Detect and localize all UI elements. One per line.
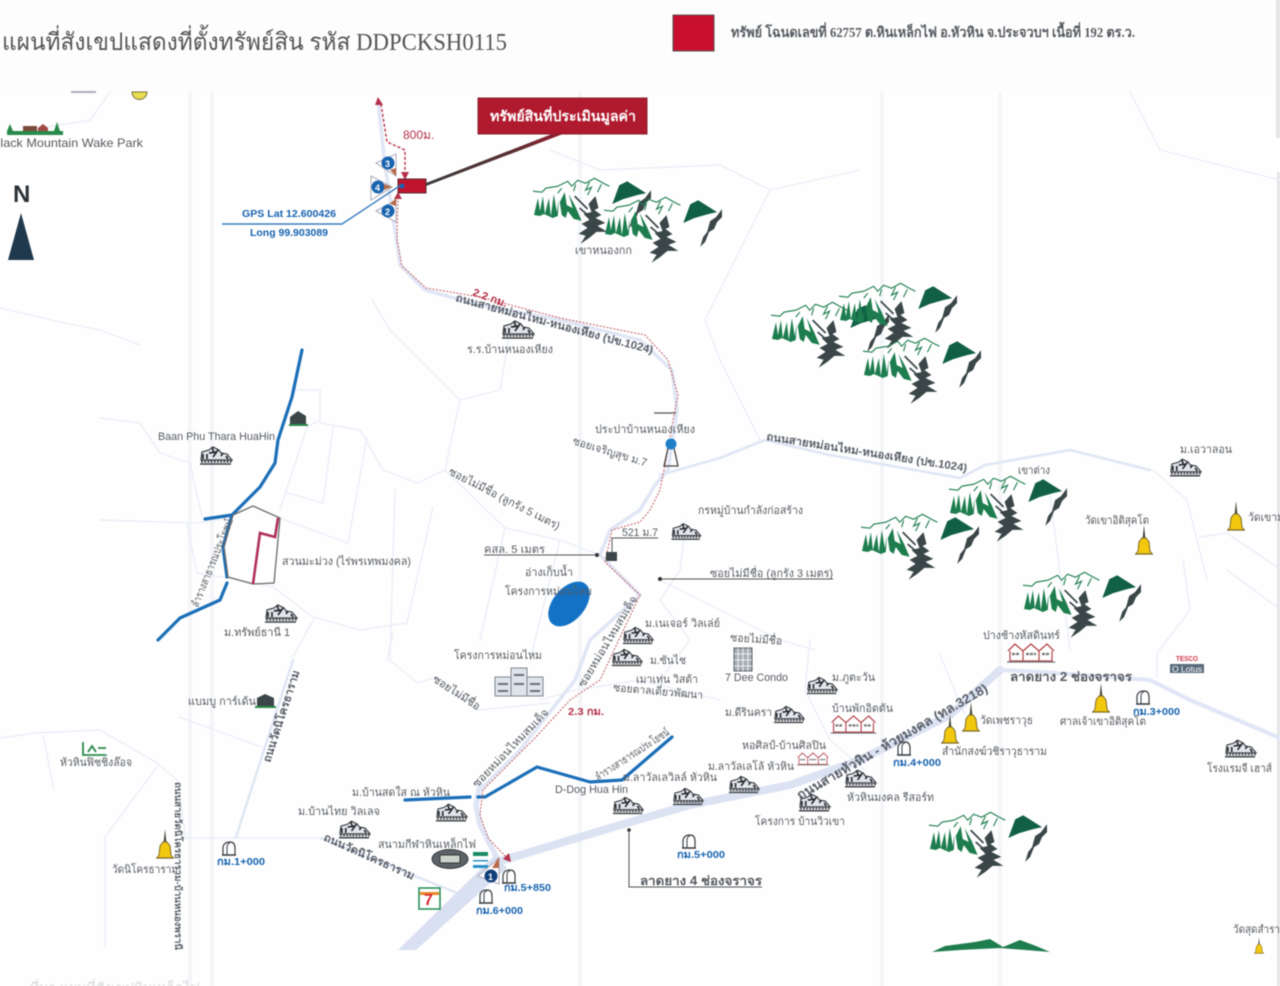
icon: km 3 bbox=[1136, 691, 1150, 704]
subject property marker bbox=[398, 179, 426, 193]
tapered road to bottom-left bbox=[398, 855, 507, 950]
road label: Wat Nikrotharam north: ถนนวัดนิโครธาราม bbox=[260, 668, 303, 764]
callout: unnamed laterite 3 m: ซอยไม่มีชื่อ (ลูกรัง 3 เมตร) bbox=[710, 565, 833, 580]
top header band bbox=[0, 0, 1280, 92]
icon: fishing lodge bbox=[83, 742, 106, 755]
photo marker 1: 1 bbox=[488, 872, 493, 882]
label: Mongkol resort: หัวหินมงคล รีสอร์ท bbox=[847, 791, 934, 804]
road label: public waterway east: ลำรางสาธารณประโยชน์ bbox=[592, 725, 672, 784]
icon: school bbox=[502, 321, 534, 338]
label: Khao Tang: เขาต่าง bbox=[1018, 465, 1050, 477]
label: เขาหนองกก: เขาหนองกก bbox=[575, 245, 632, 257]
icon: Sap Thani bbox=[265, 605, 297, 622]
label: 2.2 km: 2.2 กม. bbox=[471, 287, 509, 310]
label: km 5: กม.5+000 bbox=[677, 849, 725, 861]
label: Sunshine: ม.ซันไช bbox=[650, 654, 686, 667]
icon: houses Ittan bbox=[831, 716, 876, 733]
GPS callout bbox=[222, 184, 404, 239]
road label 1024 west: ถนนสายหม่อนไหม-หนองเหียง (ปข.1024) bbox=[454, 290, 655, 357]
callout: 4 lane bbox=[627, 828, 762, 888]
road label: highway 3218: ถนนสายหัวหิน - ห้วยมงคล (ทล.3218) bbox=[794, 681, 990, 803]
icon: stupa Wachirawut bbox=[941, 714, 959, 743]
mountain south-east bbox=[929, 812, 1047, 878]
label: Nature Valley: ม.เนเจอร์ วิลเล่ย์ bbox=[645, 617, 720, 630]
callout: ทรัพย์สินที่ประเมินมูลค่า bbox=[490, 106, 636, 125]
label: Baan Phu Thara: Baan Phu Thara HuaHin bbox=[158, 431, 275, 443]
label: project: โครงการหม่อนไหม bbox=[454, 648, 542, 662]
icon: stripes bbox=[473, 852, 488, 868]
callout: 521 M.7: 521 ม.7 bbox=[622, 527, 658, 539]
photo marker 2 bbox=[376, 198, 396, 222]
label: 800 m: 800ม. bbox=[403, 128, 434, 142]
road label: soi mulberry south: ซอยหม่อนไหมสมเด็จ bbox=[469, 706, 551, 790]
icon: stadium bbox=[432, 850, 468, 868]
road label: Wat Nikrotharam: ถนนวัดนิโครธาราม bbox=[322, 830, 417, 883]
main roads bbox=[236, 100, 1280, 893]
label: Dirinkra: ม.ดีรินครา bbox=[725, 706, 772, 719]
label: km 6: กม.6+000 bbox=[476, 905, 523, 917]
legend text: ทรัพย์ โฉนดเลขที่ 62757 ต.หินเหล็กไฟ อ.หัวหิน จ.ประจวบฯ เนื้อที่ 192 ตร.ว. bbox=[731, 21, 1135, 41]
label: Lavalle Ville: ม.ลาวัลเลวิลล์ หัวหิน bbox=[623, 771, 717, 784]
road label: soi mulberry north: ซอยหม่อนไหมสมเด็จ bbox=[575, 593, 640, 690]
icon: elephant camp bbox=[1007, 644, 1055, 662]
label: mango orchard: สวนมะม่วง (ไร่พรเทพมงคล) bbox=[282, 555, 411, 568]
icon: stupa Phetcharawut bbox=[962, 702, 980, 731]
labelled villages bbox=[200, 447, 1256, 838]
label: waterworks: ประปาบ้านหนองเหียง bbox=[595, 423, 695, 436]
label: km 3: กม.3+000 bbox=[1133, 706, 1180, 718]
label: stadium: สนามกีฬาหินเหล็กไฟ bbox=[378, 837, 476, 851]
road label: unnamed soi near condo: ซอยไม่มีชื่อ bbox=[730, 629, 783, 648]
icon: Tesco Lotus bbox=[1170, 656, 1204, 674]
road label: unnamed soi: ซอยไม่มีชื่อ bbox=[430, 671, 484, 713]
label: shrine: ศาลเจ้าเขาอิติสุคโต bbox=[1060, 714, 1146, 728]
icon: Dirinkra bbox=[774, 706, 804, 722]
label: Phutawan: ม.ภูตะวัน bbox=[832, 672, 875, 684]
label: Baan Pak Ittan: บ้านพักอิตตัน bbox=[832, 703, 893, 715]
icon: water tower bbox=[664, 438, 678, 466]
callout bbox=[478, 98, 647, 134]
icon: north arrow bbox=[8, 181, 34, 260]
icon: Bamboo Garden bbox=[255, 694, 276, 708]
label: Wat Itisukato: วัดเขาอิติสุคโต bbox=[1085, 513, 1149, 527]
label: 2 lane: ลาดยาง 2 ช่องจราจร bbox=[1010, 670, 1132, 684]
label: fishing lodge: หัวหินฟิชชิ่งล๊อจ bbox=[60, 754, 132, 769]
photo marker 4: 4 bbox=[375, 183, 380, 193]
label: G House hotel: โรงแรมจี เฮาส์ bbox=[1207, 761, 1272, 775]
title: แผนที่สังเขปแสดงที่ตั้งทรัพย์สิน รหัส DDPCKSH0115 bbox=[2, 24, 507, 56]
road label: ซอยเจริญสุข: ซอยเจริญสุข ม.7 bbox=[571, 435, 648, 469]
top edge map fragments bbox=[71, 91, 147, 100]
distance route bbox=[381, 104, 678, 858]
route arrowheads bbox=[375, 97, 511, 862]
label: km 4: กม.4+000 bbox=[893, 757, 941, 769]
photo marker 3: 3 bbox=[385, 159, 390, 169]
label: km 1: กม.1+000 bbox=[217, 856, 265, 868]
icon: Mongkol resort bbox=[845, 770, 876, 787]
icon: 7-Eleven bbox=[419, 888, 440, 909]
label: Phetcharawut: วัดเพชราวุธ bbox=[980, 715, 1033, 727]
icon: condo bbox=[734, 648, 752, 671]
icon: D-Dog bbox=[613, 797, 643, 813]
icon: village under construction bbox=[671, 524, 701, 539]
icon: houses art gallery bbox=[797, 753, 829, 765]
label: Bamboo Garden: แบมบู การ์เด้น bbox=[188, 695, 256, 708]
mountain cut off at bottom bbox=[932, 939, 1050, 952]
label: 2.3 km: 2.3 กม. bbox=[568, 706, 604, 718]
mountain east bbox=[1023, 572, 1141, 638]
icon: small stupa bbox=[1254, 937, 1264, 953]
callout: concrete 5 m: คสล. 5 เมตร bbox=[484, 544, 545, 556]
label: Mountain Vista: เมาเท่น วิสต้า bbox=[636, 674, 698, 686]
GPS callout: GPS Lat 12.600426 bbox=[242, 208, 336, 220]
callout: unnamed laterite 3 m bbox=[658, 565, 833, 581]
label: Ban Thai: ม.บ้านไทย วิลเลจ bbox=[298, 805, 380, 818]
callout connector bbox=[426, 134, 563, 186]
icon: Ban Wiew Khao bbox=[799, 794, 830, 811]
icon: Sunshine bbox=[612, 649, 642, 665]
callout: concrete 5 m bbox=[484, 544, 599, 557]
icon: Tesco Lotus: O Lotus bbox=[1172, 665, 1202, 674]
mountain cluster north-east bbox=[771, 283, 981, 404]
road label 1024 east: ถนนสายหม่อนไหม-หนองเหียง (ปข.1024) bbox=[766, 429, 969, 475]
icon: stupa right edge bbox=[1227, 501, 1245, 530]
icon: Ban Sodsai bbox=[436, 804, 467, 821]
icon: G house bbox=[1225, 740, 1256, 757]
mango orchard boundary bbox=[224, 506, 280, 584]
legend: subject property swatch bbox=[673, 15, 714, 51]
label: km 5+850: กม.5+850 bbox=[504, 882, 551, 894]
label: Wat Nikrotharam: วัดนิโครธาราม bbox=[112, 862, 178, 876]
icon: 7-Eleven: 7 bbox=[424, 892, 433, 909]
callout: 4 lane: ลาดยาง 4 ช่องจราจร bbox=[640, 874, 762, 888]
icon: north arrow: N bbox=[13, 181, 30, 208]
icon: km 6 bbox=[479, 890, 493, 903]
callout: 521 M.7 bbox=[606, 527, 658, 561]
icon: Ban Thai bbox=[339, 821, 370, 838]
icon: stupa Itisukato bbox=[1135, 525, 1153, 554]
mountain: เขาต่าง bbox=[861, 476, 1067, 580]
label: Wachirawut: สำนักสงฆ์วชิราวุธาราม bbox=[942, 745, 1047, 758]
label: Ban Wiew Khao: โครงการ บ้านวิวเขา bbox=[755, 814, 845, 828]
label: Ban Sodsai: ม.บ้านสดใส ณ หัวหิน bbox=[352, 786, 450, 799]
road label: vertical: ถนนสายวัดนิโครธาราม-บ้านหนองพรานี bbox=[172, 782, 184, 951]
right scan edge bbox=[1276, 0, 1280, 986]
label: school: ร.ร.บ้านหนองเหียง bbox=[467, 343, 553, 356]
label: mulberry project: โครงการหม่อนไหม bbox=[505, 584, 592, 598]
icon: km 5+850 bbox=[502, 870, 516, 883]
icon: Lavalle Lo bbox=[729, 776, 759, 792]
label: condo: 7 Dee Condo bbox=[725, 672, 788, 684]
blue canals bbox=[158, 350, 672, 800]
photo marker 2: 2 bbox=[385, 207, 390, 217]
GPS callout: Long 99.903089 bbox=[250, 227, 328, 239]
mountain: เขาหนองกก bbox=[533, 178, 722, 263]
icon: Nature Valley bbox=[623, 627, 653, 643]
icon: stupa shrine bbox=[1092, 683, 1110, 712]
icon: km 4 bbox=[897, 742, 911, 755]
label: elephant camp: ปางช้างหัสดินทร์ bbox=[983, 629, 1060, 642]
icon: Tesco Lotus: TESCO bbox=[1176, 656, 1198, 663]
label: public waterway west: ลำรางสาธารณประโยชน์ bbox=[188, 516, 236, 609]
road label: unnamed laterite 5 m: ซอยไม่มีชื่อ (ลูกรัง 5 เมตร) bbox=[447, 463, 563, 533]
icon: project buildings bbox=[495, 668, 543, 696]
icon: green house north bbox=[289, 411, 308, 426]
leader: waterworks bbox=[654, 412, 676, 414]
road label: Soi Tan Diao Phatthana: ซอยตาลเดี่ยวพัฒนา bbox=[613, 679, 704, 702]
photo marker 4 bbox=[371, 176, 392, 200]
label: Avalon: ม.เอวาลอน bbox=[1180, 444, 1232, 456]
label: reservoir: อ่างเก็บน้ำ bbox=[525, 564, 573, 579]
icon: Avalon bbox=[1170, 459, 1201, 476]
icon: stupa Nikrotharam bbox=[156, 829, 174, 858]
icon: km 1 bbox=[222, 842, 236, 855]
reservoir bbox=[540, 574, 598, 634]
photo marker 1 bbox=[478, 857, 499, 884]
photo marker 3 bbox=[376, 154, 396, 176]
icon: Phutawan bbox=[807, 677, 837, 693]
icon: Phu Thara bbox=[200, 447, 232, 464]
label: Lavalle Lo: ม.ลาวัลเลโล้ หัวหิน bbox=[708, 759, 794, 773]
icon: Lavalle Ville bbox=[673, 788, 703, 804]
icon: wake park bbox=[7, 122, 63, 135]
icon: km 5 bbox=[682, 835, 696, 848]
label: Sap Thani: ม.ทรัพย์ธานี 1 bbox=[224, 626, 290, 639]
label: village under construction: กรหมู่บ้านกำลังก่อสร้าง bbox=[698, 505, 803, 517]
label: D-Dog: D-Dog Hua Hin bbox=[555, 784, 628, 796]
label: art gallery: หอศิลป์-บ้านศิลปิน bbox=[742, 739, 826, 752]
